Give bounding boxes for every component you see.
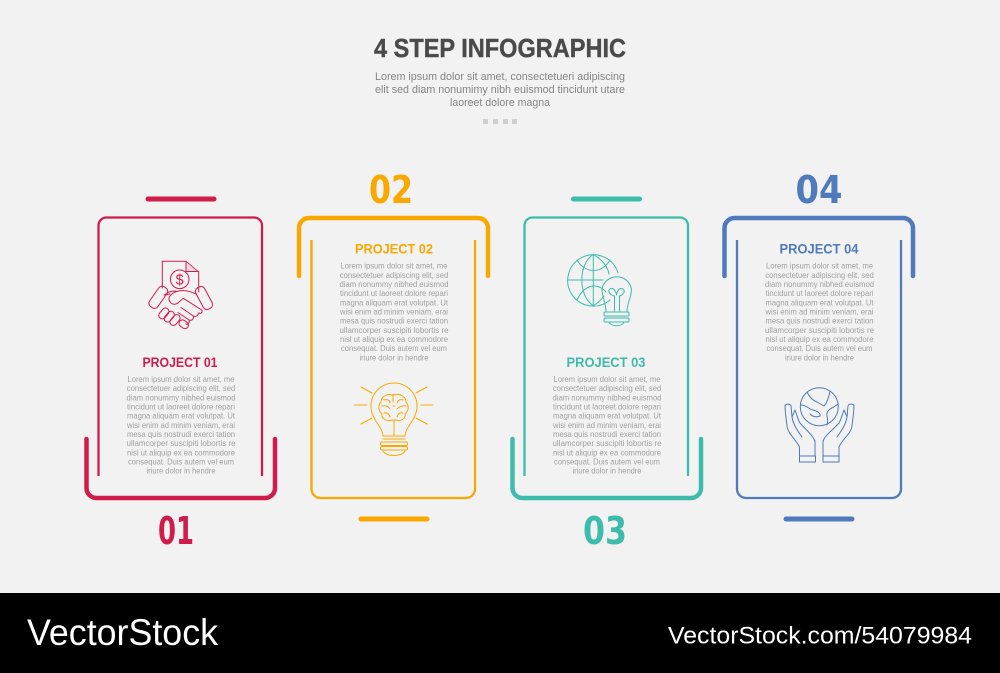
card outline — [98, 217, 262, 476]
body text: consectetuer adipiscing elit, sed — [765, 270, 874, 280]
body text: iriure dolor in hendre — [360, 352, 429, 362]
body text: mesa quis nostrudi exerci tation — [127, 429, 235, 439]
body text: diam nonummy nibhed euismod — [765, 279, 874, 289]
bottom bracket — [512, 439, 701, 498]
body text: Lorem ipsum dolor sit amet, me — [340, 261, 448, 271]
body text: magna aliquam erat volutpat. Ut — [127, 411, 236, 421]
icon: handshake with invoice: $ — [176, 272, 184, 288]
body text: wisi enim ad minim veniam, erai — [552, 420, 661, 430]
body text: tincidunt ut laoreet dolore repari — [766, 288, 874, 298]
bottom bracket — [86, 439, 275, 498]
footer band — [0, 593, 1000, 673]
bottom bar — [784, 516, 854, 522]
icon: hands holding globe — [785, 388, 854, 462]
panel: project 03 — [512, 196, 701, 553]
body text: magna aliquam erat volutpat. Ut — [340, 297, 449, 307]
logo wordmark: VectorStock — [27, 612, 218, 653]
body text: consequat. Duis autem vel eum — [766, 343, 872, 353]
body text — [765, 261, 874, 362]
body text — [339, 261, 449, 362]
body text: nisl ut aliquip ex ea commodore — [127, 447, 235, 457]
heading: PROJECT 01 — [142, 355, 218, 370]
body text: tincidunt ut laoreet dolore repari — [340, 288, 448, 298]
body text: wisi enim ad minim veniam, erai — [339, 307, 448, 317]
icon: handshake with invoice — [147, 261, 214, 330]
intro text: laoreet dolore magna — [450, 97, 551, 109]
top bracket — [724, 218, 913, 276]
body text: consequat. Duis autem vel eum — [341, 343, 447, 353]
header — [374, 35, 626, 124]
intro text: Lorem ipsum dolor sit amet, consectetueri adipiscing — [375, 71, 625, 83]
bottom bar — [358, 516, 430, 522]
body text: mesa quis nostrudi exerci tation — [340, 316, 448, 326]
body text: Lorem ipsum dolor sit amet, me — [554, 374, 661, 384]
body text: tincidunt ut laoreet dolore repari — [127, 402, 235, 412]
body text: ullamcorper suscipiti lobortis re — [340, 325, 449, 335]
intro text: elit sed diam nonumimy nibh euismod tincidunt utare — [375, 84, 625, 96]
body text: consectetuer adipiscing elit, sed — [340, 270, 448, 280]
pagination dots — [483, 119, 517, 124]
body text: ullamcorper suscipiti lobortis re — [552, 438, 662, 448]
body text: nisl ut aliquip ex ea commodore — [766, 334, 874, 344]
body text: mesa quis nostrudi exerci tation — [766, 316, 874, 326]
number 03: 03 — [583, 509, 627, 553]
body text — [552, 374, 662, 476]
body text: ullamcorper suscipiti lobortis re — [765, 325, 874, 335]
card outline — [737, 240, 901, 498]
heading: PROJECT 03 — [566, 355, 646, 370]
body text: magna aliquam erat volutpat. Ut — [766, 297, 874, 307]
body text: consequat. Duis autem vel eum — [128, 456, 234, 466]
body text: Lorem ipsum dolor sit amet, me — [766, 261, 873, 271]
heading: PROJECT 02 — [355, 242, 433, 256]
number 04: 04 — [796, 168, 842, 212]
panel: project 01 — [86, 196, 275, 553]
image reference: VectorStock.com/54079984 — [668, 622, 972, 650]
body text: diam nonummy nibhed euismod — [126, 392, 236, 402]
icon: globe and light bulb — [568, 254, 632, 326]
body text: tincidunt ut laoreet dolore repari — [553, 402, 661, 412]
body text: mesa quis nostrudi exerci tation — [553, 429, 661, 439]
number 01: 01 — [158, 509, 194, 553]
body text: iriure dolor in hendre — [146, 466, 216, 476]
icon: light bulb with brain — [354, 383, 433, 456]
card outline — [312, 240, 475, 498]
card outline — [524, 217, 688, 476]
body text: diam nonummy nibhed euismod — [552, 392, 662, 402]
heading: PROJECT 04 — [780, 242, 859, 256]
panel: project 04 — [724, 168, 913, 522]
body text: nisl ut aliquip ex ea commodore — [340, 334, 448, 344]
top bar — [146, 196, 216, 202]
body text: consectetuer adipiscing elit, sed — [127, 383, 235, 393]
top bracket — [299, 218, 488, 276]
body text: diam nonummy nibhed euismod — [340, 279, 449, 289]
body text: magna aliquam erat volutpat. Ut — [553, 411, 662, 421]
body text: consectetuer adipiscing elit, sed — [553, 383, 661, 393]
body text — [126, 374, 236, 476]
top bar — [571, 196, 642, 202]
body text: ullamcorper suscipiti lobortis re — [126, 438, 236, 448]
title: 4 STEP INFOGRAPHIC — [374, 35, 626, 63]
body text: iriure dolor in hendre — [572, 466, 642, 476]
body text: nisl ut aliquip ex ea commodore — [553, 447, 661, 457]
body text: wisi enim ad minim veniam, erai — [126, 420, 235, 430]
body text: iriure dolor in hendre — [785, 352, 854, 362]
body text: wisi enim ad minim veniam, erai — [765, 307, 874, 317]
number 02: 02 — [369, 168, 413, 212]
body text: Lorem ipsum dolor sit amet, me — [128, 374, 235, 384]
intro text — [375, 71, 625, 109]
body text: consequat. Duis autem vel eum — [554, 456, 660, 466]
panel: project 02 — [299, 168, 488, 522]
